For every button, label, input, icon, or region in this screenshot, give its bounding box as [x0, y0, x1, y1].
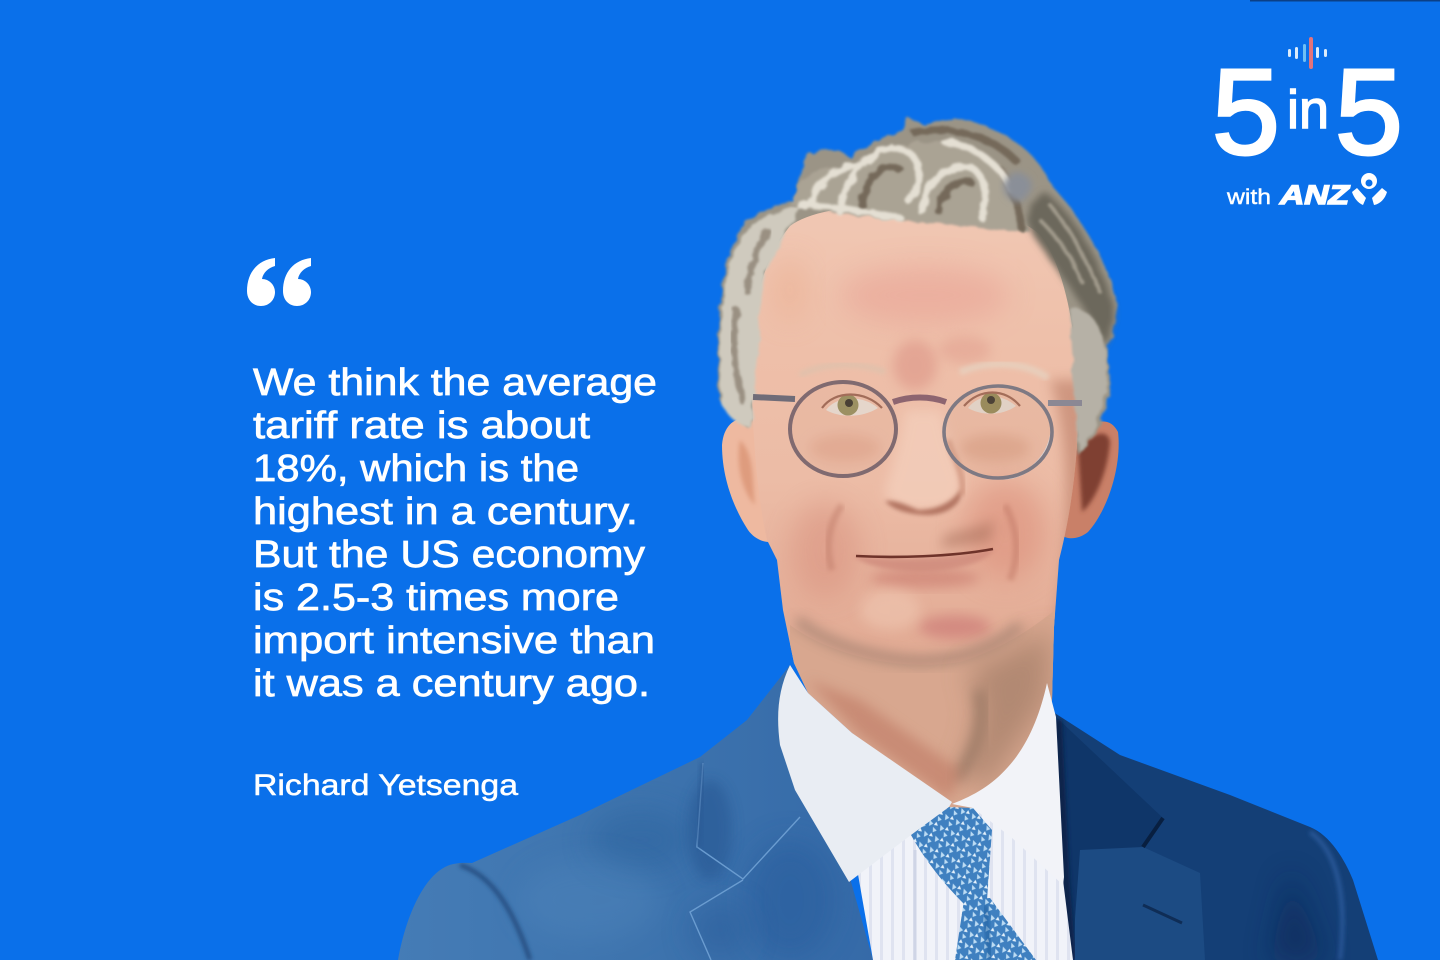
neck right shadow	[960, 630, 1052, 790]
hair curl shading	[862, 130, 1022, 228]
logo: 5 in 5 with ANZ: 5	[1212, 44, 1280, 180]
brow right	[939, 336, 991, 364]
attribution: Richard Yetsenga	[253, 769, 518, 802]
logo: 5 in 5 with ANZ: with	[1226, 186, 1271, 209]
tie	[911, 807, 1036, 960]
quote text: is 2.5-3 times more	[253, 577, 619, 619]
icon: ANZ knot	[1352, 173, 1387, 205]
neck fill	[790, 610, 1055, 820]
hair right lower	[1070, 309, 1108, 452]
hair right highlights	[1042, 205, 1100, 292]
quote text	[253, 362, 657, 705]
logo: 5 in 5 with ANZ: 5	[1335, 44, 1403, 180]
lower lip redness	[870, 568, 980, 588]
portrait: Richard Yetsenga	[390, 117, 1390, 960]
left ear inner	[739, 440, 755, 505]
left temple	[774, 267, 806, 312]
hair blue-grey patch	[1004, 173, 1032, 201]
sleeve seam	[460, 865, 530, 960]
nasolabial fold	[828, 505, 842, 570]
right lower lapel	[1075, 847, 1205, 960]
shirt front	[845, 800, 1073, 960]
quote text: 18%, which is the	[253, 448, 579, 490]
logo: 5 in 5 with ANZ: ANZ	[1279, 180, 1351, 210]
neck crease shadow	[955, 690, 981, 780]
lapel stitching	[690, 763, 800, 960]
quote text: it was a century ago.	[253, 663, 650, 705]
left cheek	[790, 502, 860, 598]
left eye	[822, 394, 882, 416]
right cheek	[965, 480, 1045, 580]
brow redness	[893, 340, 937, 390]
quote text: But the US economy	[253, 534, 645, 576]
lapel notch	[1143, 818, 1163, 847]
quotation mark	[247, 258, 311, 306]
hair back	[717, 117, 1117, 455]
chin redness	[919, 615, 991, 639]
icon: sound wave	[1288, 37, 1327, 69]
mottled shading	[606, 822, 672, 858]
placket	[914, 850, 916, 960]
chin shadow	[797, 620, 1020, 661]
logo: 5 in 5 with ANZ	[1212, 37, 1403, 210]
quote text: import intensive than	[253, 620, 655, 662]
right eyebrow	[960, 364, 1048, 378]
buttonhole	[1143, 905, 1182, 923]
chin highlight	[860, 590, 920, 630]
hair left side	[719, 205, 800, 430]
right upper lapel shadow	[1056, 718, 1162, 926]
right smile fold	[1005, 505, 1016, 580]
upper-lip shadow	[940, 520, 995, 548]
right ear	[1060, 422, 1119, 538]
left ear	[722, 418, 776, 542]
left eyebrow	[800, 365, 885, 375]
right eye	[964, 392, 1020, 414]
tie dimple shadow	[985, 905, 990, 960]
under eye left	[813, 434, 876, 462]
left shirt collar	[778, 665, 952, 882]
hair left shading	[734, 232, 768, 400]
inner lapel dark edge	[1058, 720, 1072, 960]
right side shadow	[1048, 375, 1078, 695]
hair right dark	[1028, 192, 1114, 345]
face and neck	[752, 210, 1078, 810]
logo: 5 in 5 with ANZ: in	[1287, 80, 1329, 140]
nose	[884, 410, 963, 515]
left suit	[390, 660, 880, 960]
quote text: highest in a century.	[253, 491, 638, 533]
under eye right	[960, 434, 1030, 462]
neck left flush	[816, 684, 958, 798]
right suit	[1050, 700, 1390, 960]
hair curls	[800, 142, 1012, 218]
forehead redness	[840, 265, 1010, 325]
sleeve highlight	[1310, 832, 1342, 960]
glasses	[753, 382, 1082, 478]
quote text: tariff rate is about	[253, 405, 591, 447]
arm shadow	[1272, 894, 1320, 960]
quote text: We think the average	[253, 362, 657, 404]
right shirt collar	[952, 683, 1064, 885]
mouth	[854, 549, 994, 572]
top edge bar	[1250, 0, 1440, 2]
hair top light	[790, 142, 1030, 232]
right ear inner	[1078, 434, 1110, 512]
